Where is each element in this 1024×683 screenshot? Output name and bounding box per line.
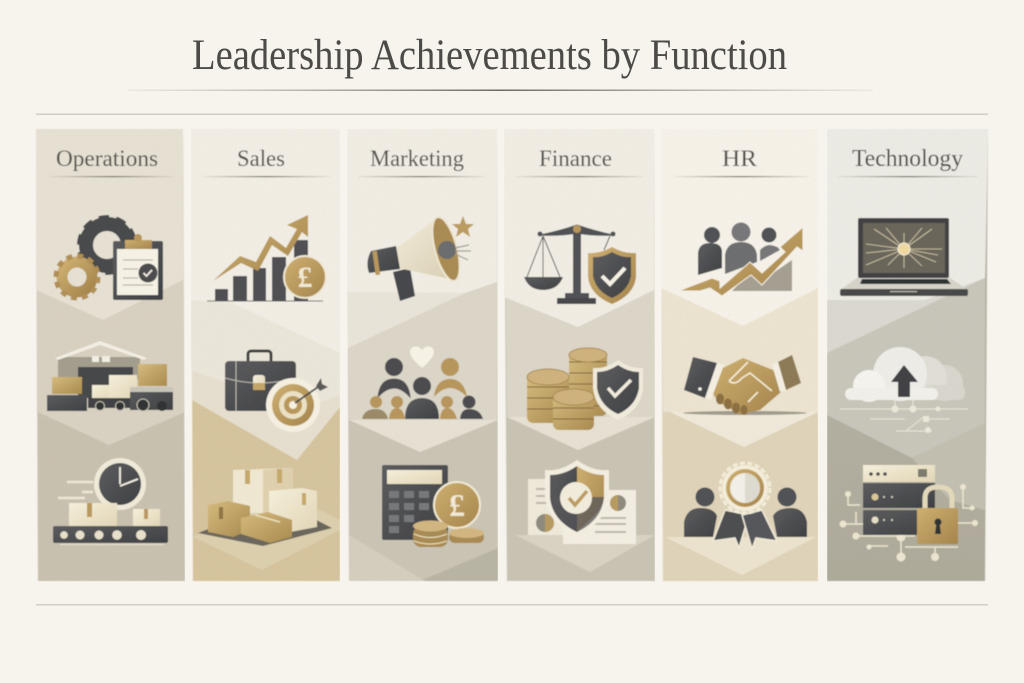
marketing background bbox=[347, 129, 498, 581]
icon: rising bar chart with pound coin bbox=[207, 215, 326, 302]
icon: stacked boxes bbox=[198, 468, 332, 546]
sales background bbox=[191, 129, 340, 581]
HR background bbox=[661, 129, 818, 581]
operations heading: Operations bbox=[56, 146, 158, 171]
icon: gears and clipboard bbox=[56, 218, 163, 300]
icon: coin stacks and shield bbox=[527, 348, 643, 430]
icon: calculator and coins: £ bbox=[449, 487, 465, 523]
finance background bbox=[504, 129, 655, 581]
panel gutters bbox=[185, 129, 827, 581]
panel texture bbox=[36, 129, 988, 581]
HR heading: HR bbox=[722, 146, 758, 171]
title: Leadership Achievements by Function bbox=[192, 32, 787, 79]
panel: HR bbox=[661, 129, 818, 581]
icon: briefcase and target bbox=[225, 351, 328, 432]
icon: server with padlock and network bbox=[840, 465, 978, 562]
panel: operations bbox=[36, 129, 185, 581]
icon: clock and conveyor bbox=[53, 458, 168, 545]
icon: award ribbon with team bbox=[684, 463, 807, 549]
panel: technology bbox=[827, 129, 988, 581]
sales heading: Sales bbox=[237, 146, 285, 171]
finance heading: Finance bbox=[539, 146, 612, 171]
panel: marketing bbox=[347, 129, 498, 581]
operations background bbox=[36, 129, 185, 581]
icon: warehouse and truck bbox=[47, 341, 173, 411]
panel: finance bbox=[504, 129, 655, 581]
marketing heading: Marketing bbox=[370, 146, 464, 171]
icon: rising bar chart with pound coin: £ bbox=[298, 261, 312, 294]
panel: sales bbox=[191, 129, 340, 581]
icon: handshake bbox=[683, 355, 807, 415]
icon: calculator and coins bbox=[382, 465, 484, 547]
icon: documents and shield bbox=[528, 460, 636, 544]
icon: scales and shield bbox=[524, 225, 636, 304]
icon: cloud upload bbox=[840, 347, 968, 433]
icon: team with growth arrow bbox=[678, 222, 803, 296]
technology background bbox=[827, 129, 988, 581]
icon: audience with heart bbox=[362, 346, 483, 419]
icon: laptop with circuit bbox=[840, 218, 968, 296]
technology heading: Technology bbox=[852, 146, 963, 172]
icon: megaphone and star bbox=[367, 214, 474, 301]
